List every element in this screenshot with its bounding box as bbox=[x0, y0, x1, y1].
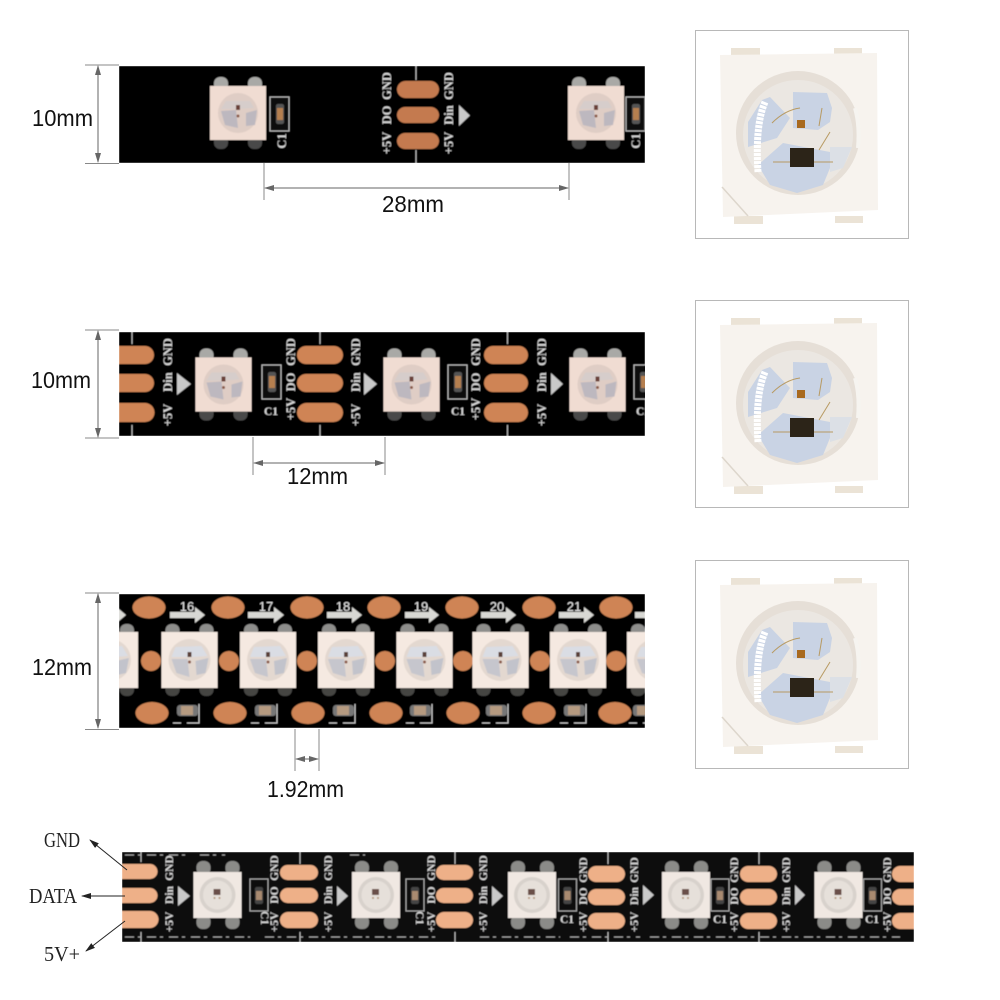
dimension: strip 1 width: 28mm bbox=[382, 191, 444, 217]
pad labels 4: DO bbox=[269, 886, 281, 904]
pad labels 4: GND bbox=[478, 855, 490, 881]
capacitor right 1 bbox=[626, 97, 645, 131]
LED 2b bbox=[384, 348, 440, 420]
pad labels 2: Din bbox=[535, 372, 549, 392]
pad labels 2: C1 bbox=[451, 406, 465, 418]
capacitor 2b bbox=[448, 365, 467, 399]
pad labels 4: GND bbox=[269, 855, 281, 881]
dimension: strip 2 width bbox=[31, 330, 385, 489]
pad labels 4: DO bbox=[882, 887, 894, 905]
pad labels 2: +5V bbox=[535, 404, 549, 426]
panel: 60 LED strip bbox=[119, 332, 653, 436]
pad labels 2: DO bbox=[469, 372, 483, 391]
pad labels 2: +5V bbox=[349, 404, 363, 426]
edge scuffs bbox=[125, 855, 900, 937]
pad labels 4 bbox=[164, 855, 894, 932]
callout: DATA: DATA bbox=[29, 884, 78, 908]
copper pads 4 bbox=[122, 864, 914, 929]
pad labels 2: +5V bbox=[161, 404, 175, 426]
pad labels 4: Din bbox=[164, 885, 176, 904]
panel: LED chip photo 1 bbox=[696, 30, 908, 238]
panel: 30 LED strip bbox=[119, 66, 645, 163]
pad labels 4: +5V bbox=[882, 911, 894, 932]
pad labels 1: DO bbox=[380, 105, 394, 124]
LED numbers: 18 bbox=[336, 599, 350, 614]
dimension: strip 3 width: 12mm bbox=[32, 654, 92, 680]
pad labels 4: +5V bbox=[729, 911, 741, 932]
cut line 1 bbox=[415, 66, 417, 163]
cut lines 4 bbox=[141, 852, 759, 942]
LED numbers bbox=[180, 601, 582, 612]
pad labels 1: +5V bbox=[442, 132, 456, 154]
pad labels 4: GND bbox=[323, 855, 335, 881]
strip board 1 bbox=[119, 66, 645, 163]
numbered arrows 3 bbox=[119, 607, 645, 623]
direction arrows 2 bbox=[177, 373, 563, 395]
panel: LED chip photo 2 bbox=[696, 300, 908, 508]
capacitor 2c bbox=[632, 364, 645, 400]
LEDs 4 bbox=[194, 861, 862, 929]
pad labels 1: GND bbox=[442, 72, 456, 100]
dimension: strip 1 width: 10mm bbox=[32, 105, 93, 131]
pad labels 1: C1 bbox=[275, 133, 289, 149]
direction arrow 1 bbox=[459, 105, 470, 126]
pad labels 1: Din bbox=[442, 105, 456, 125]
pad labels 4: +5V bbox=[629, 911, 641, 932]
callout: DATA bbox=[29, 884, 125, 908]
LED numbers: 19 bbox=[414, 599, 428, 614]
pad labels 4: GND bbox=[781, 857, 793, 883]
pad labels 2 bbox=[161, 338, 650, 426]
dimension: strip 3 width bbox=[32, 593, 344, 802]
pad labels 1: GND bbox=[380, 72, 394, 100]
pad labels 2: Din bbox=[349, 372, 363, 392]
capacitors 4 bbox=[250, 879, 882, 911]
copper pads 1 bbox=[397, 81, 439, 149]
LED numbers: 16 bbox=[180, 599, 194, 614]
pad labels 1 bbox=[275, 72, 643, 154]
pad labels 4: +5V bbox=[426, 911, 438, 932]
pad labels 4: C1 bbox=[258, 911, 270, 925]
pad labels 4: C1 bbox=[865, 914, 879, 926]
pad labels 4: Din bbox=[781, 886, 793, 905]
pad labels 4: GND bbox=[729, 857, 741, 883]
pad labels 2: C1 bbox=[636, 406, 650, 418]
pad labels 2: DO bbox=[284, 372, 298, 391]
pad labels 4: GND bbox=[426, 855, 438, 881]
strip board 3 bbox=[119, 594, 645, 728]
LED numbers: 21 bbox=[567, 599, 581, 614]
pad labels 2: GND bbox=[284, 338, 298, 366]
pad labels 4: +5V bbox=[323, 911, 335, 932]
LED row 3 bbox=[119, 623, 645, 697]
copper pads 2 bbox=[119, 346, 528, 422]
pad labels 4: C1 bbox=[713, 914, 727, 926]
pad labels 4: +5V bbox=[478, 911, 490, 932]
pad labels 4: +5V bbox=[781, 911, 793, 932]
pad labels 2: C1 bbox=[264, 406, 278, 418]
strip board 4 bbox=[122, 852, 914, 942]
copper pads 3 bbox=[132, 596, 632, 724]
LED right 1 bbox=[568, 77, 624, 149]
pad labels 4: C1 bbox=[560, 914, 574, 926]
pad labels 4: +5V bbox=[269, 911, 281, 932]
pad labels 4: DO bbox=[426, 886, 438, 904]
pad labels 4: DO bbox=[578, 887, 590, 905]
callout: 5V+: 5V+ bbox=[44, 942, 80, 966]
pad labels 1: C1 bbox=[629, 133, 643, 149]
LED numbers: 17 bbox=[259, 599, 273, 614]
pad labels 2: +5V bbox=[469, 398, 483, 420]
callout: GND bbox=[44, 828, 127, 870]
capacitors 3 bbox=[173, 704, 655, 723]
pad labels 2: GND bbox=[349, 338, 363, 366]
callout: 5V+ bbox=[44, 921, 125, 966]
pad labels 4: GND bbox=[164, 855, 176, 881]
pad labels 4: DO bbox=[729, 887, 741, 905]
panel: LED chip photo 3 bbox=[696, 560, 908, 768]
callout: GND: GND bbox=[44, 828, 80, 852]
pad labels 2: GND bbox=[469, 338, 483, 366]
dimension: strip 2 width: 10mm bbox=[31, 367, 91, 393]
pad labels 4: Din bbox=[323, 885, 335, 904]
pad labels 4: +5V bbox=[578, 911, 590, 932]
pad labels 4: GND bbox=[578, 857, 590, 883]
pad labels 4: C1 bbox=[413, 911, 425, 925]
pad labels 2: +5V bbox=[284, 398, 298, 420]
panel: 144 LED strip bbox=[119, 594, 645, 728]
pad labels 4: Din bbox=[478, 885, 490, 904]
pad labels 2: Din bbox=[161, 372, 175, 392]
capacitor 2a bbox=[262, 365, 281, 399]
pad labels 4: GND bbox=[629, 857, 641, 883]
LED left 1 bbox=[210, 77, 266, 149]
dimension: strip 2 width: 12mm bbox=[287, 463, 348, 489]
strip board 2 bbox=[119, 332, 645, 436]
pad labels 4: Din bbox=[629, 886, 641, 905]
pad labels 4: +5V bbox=[164, 911, 176, 932]
LED 2a bbox=[196, 348, 252, 420]
pad labels 1: +5V bbox=[380, 132, 394, 154]
pad labels 2: GND bbox=[535, 338, 549, 366]
LED numbers: 20 bbox=[490, 599, 504, 614]
dimension: strip 1 width bbox=[32, 65, 569, 217]
cut lines 2 bbox=[132, 332, 508, 436]
LED 2c bbox=[570, 348, 626, 420]
direction arrows 4 bbox=[178, 885, 805, 906]
dimension: strip 3 width: 1.92mm bbox=[267, 776, 344, 802]
pad labels 2: GND bbox=[161, 338, 175, 366]
panel: wiring strip bbox=[122, 852, 914, 942]
pad labels 4: GND bbox=[882, 857, 894, 883]
capacitor left 1 bbox=[270, 97, 289, 131]
